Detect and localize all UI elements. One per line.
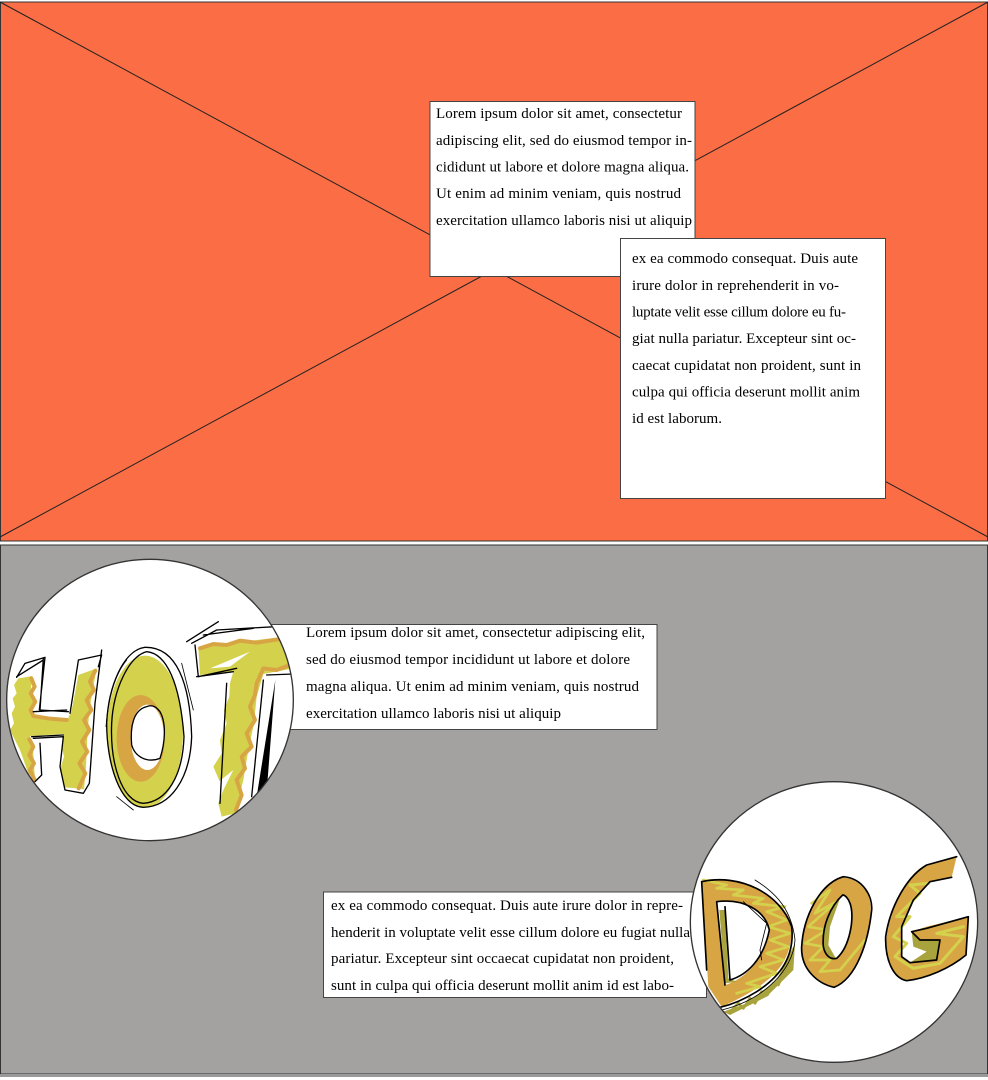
text block: second orange panel box: ex ea commodo consequat. Duis aute — [632, 251, 858, 267]
icon: HOT lettering in circle — [7, 559, 293, 841]
text block: second orange panel box: irure dolor in reprehenderit in vo- — [632, 278, 839, 294]
text block: first orange panel box: cididunt ut labore et dolore magna aliqua. — [436, 160, 689, 176]
text block: upper grey panel box: Lorem ipsum dolor sit amet, consectetur adipiscing elit, — [306, 625, 645, 641]
text block: lower grey panel box — [324, 892, 706, 998]
text block: second orange panel box: culpa qui officia deserunt mollit anim — [632, 384, 860, 400]
icon: DOG lettering in circle — [690, 782, 978, 1062]
text block: upper grey panel box: sed do eiusmod tempor incididunt ut labore et dolore — [306, 652, 630, 668]
text block: first orange panel box: Lorem ipsum dolor sit amet, consectetur — [436, 106, 682, 122]
text block: first orange panel box: adipiscing elit, sed do eiusmod tempor in- — [436, 133, 692, 149]
text block: lower grey panel box: ex ea commodo consequat. Duis aute irure dolor in repre- — [331, 898, 683, 914]
text block: upper grey panel box: magna aliqua. Ut enim ad minim veniam, quis nostrud — [306, 679, 640, 695]
text block: lower grey panel box: sunt in culpa qui officia deserunt mollit anim id est labo- — [331, 978, 674, 994]
text block: first orange panel box: Ut enim ad minim veniam, quis nostrud — [436, 186, 682, 202]
text block: second orange panel box — [620, 238, 886, 498]
panel: grey bottom panel — [0, 545, 988, 1076]
text block: first orange panel box: exercitation ullamco laboris nisi ut aliquip — [436, 213, 692, 229]
text block: upper grey panel box — [270, 624, 657, 730]
text block: second orange panel box: giat nulla pariatur. Excepteur sint oc- — [632, 331, 856, 347]
text block: upper grey panel box: exercitation ullamco laboris nisi ut aliquip — [306, 706, 561, 722]
text block: lower grey panel box: pariatur. Excepteur sint occaecat cupidatat non proident, — [331, 951, 674, 967]
panel: orange top panel — [0, 2, 988, 541]
text block: lower grey panel box: henderit in voluptate velit esse cillum dolore eu fugiat nulla — [331, 925, 690, 941]
text block: second orange panel box: caecat cupidatat non proident, sunt in — [632, 358, 862, 374]
text block: first orange panel box — [430, 102, 695, 276]
text block: second orange panel box: id est laborum. — [632, 411, 722, 427]
text block: second orange panel box: luptate velit esse cillum dolore eu fu- — [632, 304, 846, 320]
